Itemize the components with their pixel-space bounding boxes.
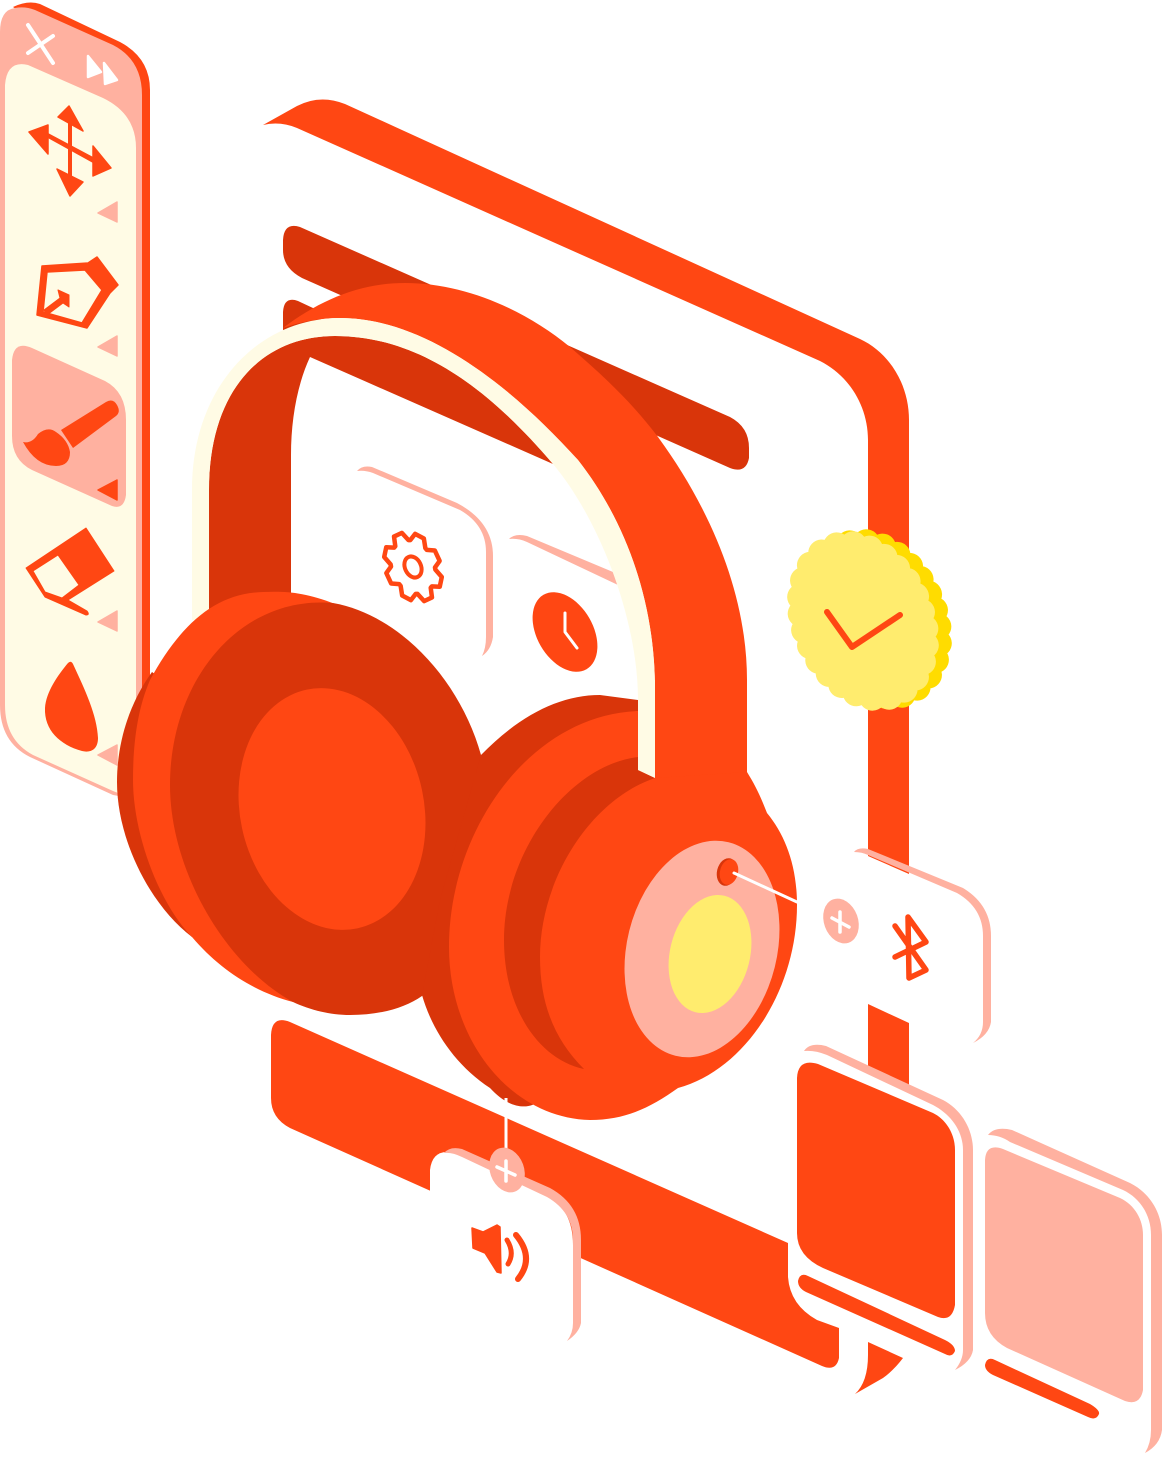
panel: phone frame outline bbox=[263, 99, 909, 874]
headband inner dark bbox=[209, 336, 553, 612]
thumbnail caption bar bbox=[985, 1359, 1099, 1418]
icon: clock bbox=[519, 581, 611, 683]
ear cup yellow centre bbox=[657, 886, 763, 1022]
icon: check mark bbox=[827, 612, 900, 647]
icon: paint brush bbox=[23, 401, 119, 466]
phone frame lower segment bbox=[868, 1004, 909, 1090]
headband cream stripe bbox=[192, 318, 655, 778]
icon: bluetooth bbox=[895, 917, 926, 978]
icon: pen tool pentagon bbox=[37, 257, 118, 328]
left ear cup bbox=[117, 592, 481, 1015]
icon: gear bbox=[374, 523, 452, 611]
icon: eraser bbox=[26, 528, 114, 615]
icon: speaker volume bbox=[472, 1225, 526, 1279]
callout line to bluetooth bbox=[734, 873, 797, 902]
icon: close cross bbox=[28, 25, 53, 63]
card: bluetooth bbox=[817, 848, 991, 1043]
icon: selected tool highlight bbox=[12, 346, 126, 507]
thumbnail image bbox=[985, 1147, 1143, 1402]
icon: plus button bbox=[817, 894, 865, 948]
phone frame bottom corner bbox=[855, 1342, 903, 1394]
card: speaker bbox=[430, 1098, 581, 1345]
card: settings gear bbox=[357, 466, 493, 656]
ear cup pink disc bbox=[603, 824, 801, 1074]
panel: lower orange bar bbox=[271, 1020, 839, 1368]
icon: move arrows bbox=[29, 106, 111, 196]
card: pink thumbnail bbox=[985, 1129, 1162, 1453]
ear cup button bbox=[714, 856, 741, 888]
card: orange thumbnail bbox=[797, 1045, 973, 1370]
connector line bbox=[504, 1098, 508, 1152]
left ear cushion bbox=[217, 671, 447, 947]
right ear cup bbox=[422, 695, 801, 1120]
phone upper dark bar bbox=[283, 226, 749, 470]
headband outer bbox=[283, 283, 747, 790]
headband cream stripe end bbox=[638, 680, 655, 778]
card: clock bbox=[509, 535, 618, 683]
badge: check mark seal bbox=[777, 522, 962, 718]
icon: plus button bbox=[483, 1143, 531, 1197]
thumbnail image bbox=[797, 1063, 955, 1318]
thumbnail caption bar bbox=[798, 1275, 955, 1355]
icon: small tool corner triangles bbox=[98, 202, 117, 765]
phone second dark bar bbox=[283, 300, 330, 330]
icon: fast forward bbox=[88, 56, 117, 84]
icon: ink drop bbox=[45, 662, 98, 752]
panel: left toolbar bbox=[0, 3, 150, 800]
